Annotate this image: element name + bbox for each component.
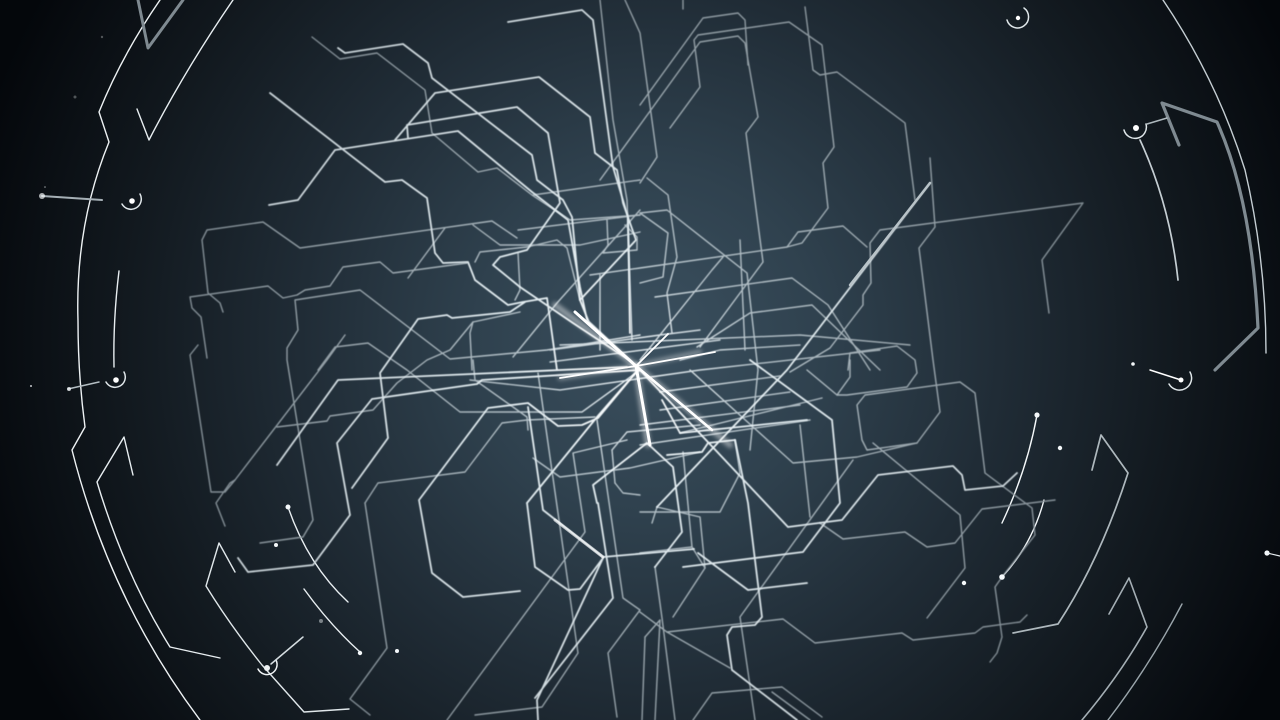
- arc with node low: [1002, 500, 1044, 577]
- left arc: [114, 271, 119, 367]
- lower left inner bracket: [206, 543, 349, 712]
- marker right: [1150, 370, 1192, 390]
- diagonal highlight: [850, 183, 930, 285]
- lower left arc b: [304, 589, 360, 652]
- right bracket: [1013, 435, 1128, 633]
- bright network lines: [238, 10, 1017, 720]
- upper right arc: [1140, 140, 1178, 280]
- marker upper right: [1124, 118, 1167, 138]
- marker left: [68, 372, 125, 389]
- marker lower left: [258, 637, 303, 675]
- lower left arc a: [288, 507, 348, 602]
- upper left arc: [137, 0, 233, 140]
- marker top right: [1007, 8, 1029, 28]
- dim network lines: [190, 0, 1083, 720]
- thick grey brackets: [138, 0, 1258, 370]
- marker upper left: [42, 194, 141, 209]
- arc with node: [1002, 415, 1037, 523]
- glowing hub: [555, 305, 730, 557]
- edge tick: [1267, 553, 1280, 556]
- lower left bracket: [97, 437, 220, 658]
- lower right bracket: [1082, 578, 1147, 720]
